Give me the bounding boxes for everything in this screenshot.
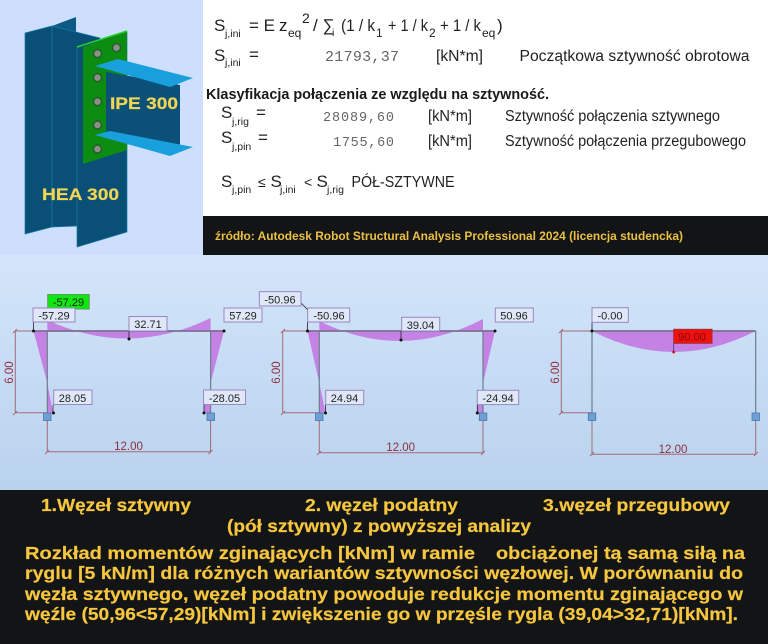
row: rigid stiffness [221,103,720,128]
text block: description: węzła sztywnego, węzeł podatny powoduje redukcje momentu zginającego w [24,584,743,604]
row: semi-rigid condition: j,pin [231,184,251,196]
label: 57.29 [224,308,262,322]
formula: initial stiffness: j,ini [224,28,241,40]
row: initial rotational stiffness: [kN*m] [436,48,483,65]
formula: initial stiffness: 2 [429,26,436,40]
label: -57.29 [33,308,75,322]
panel: caption [0,490,768,644]
caption: semi-rigid note: (pół sztywny) z powyższej analizy [227,516,531,536]
label: 24.94 [326,390,364,405]
row: initial rotational stiffness: Początkowa sztywność obrotowa [520,48,750,65]
row: semi-rigid condition: j,ini [279,184,296,196]
panel: moment diagrams [0,255,768,490]
row: pinned stiffness: S [221,128,232,147]
label: -57.29 highlighted: -57.29 [53,297,84,309]
row: initial rotational stiffness: S [214,46,225,65]
label: 28.05: 28.05 [59,393,86,405]
row: semi-rigid condition: PÓŁ-SZTYWNE [352,172,454,191]
row: initial rotational stiffness: 21793,37 [325,49,399,66]
label: -0.00: -0.00 [597,310,623,322]
label: -24.94 [477,390,519,405]
row: pinned stiffness: = [258,128,268,147]
label: -0.00 [592,308,628,322]
formula: initial stiffness: 1 [376,26,383,40]
label: 32.71: 32.71 [134,319,162,331]
row: pinned stiffness: [kN*m] [428,133,472,150]
row: semi-rigid condition: S [316,172,328,191]
dimension: 12.00: 12.00 [386,442,415,454]
formula: initial stiffness: i [332,27,334,39]
formula: initial stiffness: S [214,16,225,35]
label: 90.00 highlighted [674,329,712,344]
icon: green end plate [77,31,127,164]
row: pinned stiffness: j,pin [231,141,251,153]
row: semi-rigid condition: < [304,174,312,190]
dimension: 6.00: 6.00 [550,361,562,384]
formula: initial stiffness [214,10,503,40]
label: IPE 300: IPE 300 [110,94,178,113]
label: -57.29 highlighted [48,294,89,309]
label: HEA 300: HEA 300 [42,185,119,204]
formula: initial stiffness: / ∑ [313,16,335,35]
caption: pinned joint: 3.węzeł przegubowy [543,495,730,515]
label: 39.04: 39.04 [407,320,434,332]
formula: initial stiffness: z [279,16,288,35]
row: semi-rigid condition [221,172,454,196]
chart: rigid joint frame [4,294,262,454]
caption: rigid joint: 1.Węzeł sztywny [41,495,191,515]
label: -50.96 [308,308,350,322]
label: 28.05 [54,390,92,405]
row: semi-rigid condition: j,rig [326,184,344,196]
dimension: 6.00: 6.00 [271,361,283,384]
label: -50.96: -50.96 [313,310,345,322]
formula: initial stiffness: eq [288,26,301,40]
icon: HEA column [25,17,127,247]
row: initial rotational stiffness: j,ini [224,57,241,69]
label: -28.05 [204,390,246,405]
label: 24.94: 24.94 [331,393,358,405]
text block: description: ryglu [5 kN/m] dla różnych wariantów sztywności węzłowej. W porównaniu do [25,563,743,583]
chart: semi-rigid joint frame [259,292,533,455]
text block: description [24,543,745,624]
row: pinned stiffness [221,128,746,153]
chart: pinned joint frame [550,308,760,456]
label: 90.00 highlighted: 90.00 [678,332,706,344]
dimension: 6.00: 6.00 [4,361,16,384]
formula: initial stiffness: ) [497,16,503,35]
caption: semi-rigid joint: 2. węzeł podatny [305,495,458,515]
formula: initial stiffness: = E [249,16,275,35]
text block: description: węźle (50,96<57,29)[kNm] i zwiększenie go w przęśle rygla (39,04>32,71)[kNm]. [24,604,738,624]
source band [203,216,768,255]
row: rigid stiffness: j,rig [231,116,249,128]
text block: description: Rozkład momentów zginających [kNm] w ramie [25,543,475,563]
formula: initial stiffness: 2 [302,10,310,26]
row: rigid stiffness: = [256,103,266,122]
label: 50.96 [495,308,533,322]
panel: 3D connection model [0,0,203,255]
row: rigid stiffness: [kN*m] [428,108,472,125]
label: 57.29: 57.29 [229,310,257,322]
label: -24.94: -24.94 [482,393,514,405]
formula: initial stiffness: + 1 / k [440,16,481,35]
row: rigid stiffness: S [221,103,232,122]
label: -57.29: -57.29 [38,310,70,322]
row: initial rotational stiffness [214,45,750,69]
row: semi-rigid condition: ≤ [258,174,266,190]
label: -50.96 callout [259,292,301,306]
row: pinned stiffness: Sztywność połączenia przegubowego [505,133,746,150]
formula: initial stiffness: + 1 / k [388,16,428,35]
row: rigid stiffness: 28089,60 [323,111,394,126]
source band: źródło: Autodesk Robot Structural Analysis Professional 2024 (licencja studencka) [215,229,683,243]
row: rigid stiffness: Sztywność połączenia sztywnego [505,108,720,125]
label: -50.96 callout: -50.96 [264,294,296,306]
label: -28.05: -28.05 [209,393,240,405]
panel: stiffness formulas [206,10,750,196]
icon: IPE beam [95,59,193,156]
icon: bolts [94,44,120,153]
dimension: 12.00: 12.00 [659,444,687,456]
label: 39.04 [402,317,440,332]
dimension: 12.00: 12.00 [114,441,143,453]
row: initial rotational stiffness: = [249,45,259,64]
formula: initial stiffness: eq [482,26,495,40]
formula: initial stiffness: (1 / k [341,16,375,35]
label: 32.71 [129,316,167,331]
text block: description: obciążonej tą samą siłą na [496,543,745,563]
row: semi-rigid condition: S [270,172,282,191]
label: 50.96: 50.96 [500,310,528,322]
heading: classification: Klasyfikacja połączenia ze względu na sztywność. [206,86,549,103]
row: semi-rigid condition: S [221,172,232,191]
row: pinned stiffness: 1755,60 [333,136,394,151]
